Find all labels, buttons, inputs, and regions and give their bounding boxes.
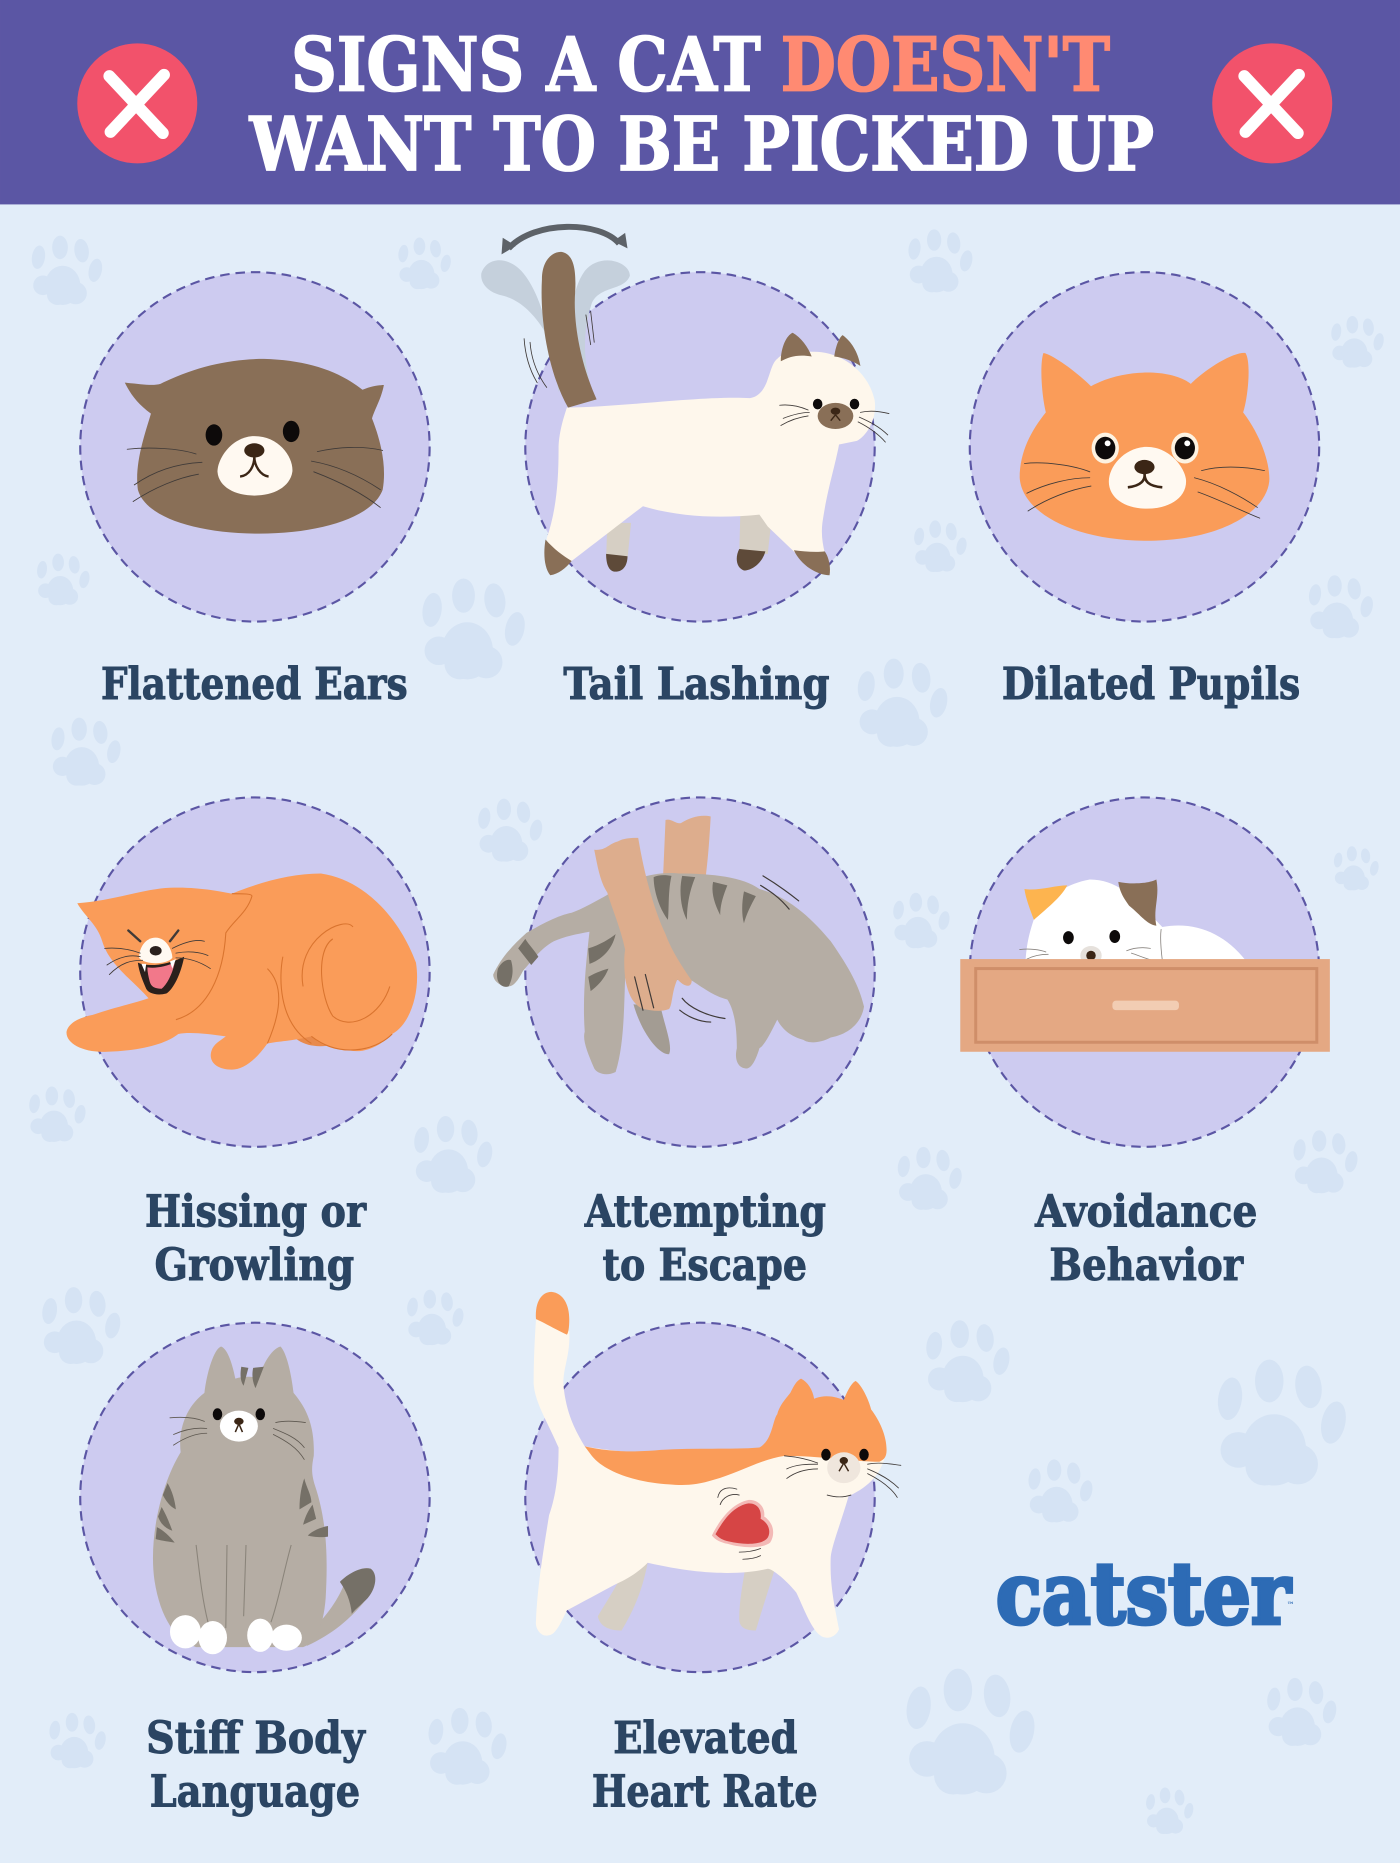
- dashed circle: [80, 797, 430, 1147]
- illustration: orange cat with dilated pupils: [1020, 353, 1269, 541]
- title: DOESN'T: [781, 22, 1110, 108]
- title: [249, 22, 1154, 188]
- illustration: siamese cat lashing tail: [481, 227, 889, 575]
- orange tail tip: [536, 1292, 569, 1335]
- white paws: [170, 1615, 302, 1654]
- label: Avoidance: [1034, 1186, 1257, 1237]
- illustration: stiff grey cat: [153, 1347, 375, 1654]
- far legs: [598, 1563, 775, 1631]
- label: Heart Rate: [592, 1766, 818, 1817]
- dashed circle: [970, 272, 1319, 622]
- panel: dilated pupils: [970, 272, 1319, 710]
- illustration: brown cat head with flattened ears: [125, 359, 384, 534]
- body: [153, 1347, 327, 1647]
- header banner: [0, 0, 1400, 204]
- label: [584, 1186, 826, 1291]
- heart: [712, 1500, 773, 1547]
- face: [213, 1408, 222, 1420]
- stripes: [156, 1367, 328, 1543]
- logo: catster: catster: [996, 1544, 1291, 1644]
- title: SIGNS A CAT: [291, 22, 761, 108]
- dashed circle: [970, 797, 1319, 1147]
- label: Stiff Body: [146, 1713, 366, 1764]
- tail: [307, 1568, 375, 1646]
- arrow: [509, 227, 619, 248]
- icon: right red X: [1212, 43, 1332, 163]
- label: Behavior: [1049, 1240, 1244, 1291]
- panel: hissing or growling: [67, 797, 430, 1291]
- dashed circle: [80, 272, 430, 622]
- far leg: [633, 1004, 670, 1054]
- far legs: [606, 511, 772, 559]
- drawer handle: [1112, 1001, 1179, 1010]
- label: Dilated Pupils: [1002, 659, 1300, 710]
- illustration: cat hiding behind drawer: [960, 879, 1330, 1052]
- label: [146, 1713, 366, 1817]
- drawer: [960, 959, 1330, 1052]
- dashed circle: [525, 797, 875, 1147]
- stripes: [497, 875, 756, 991]
- label: Flattened Ears: [101, 659, 408, 710]
- ears and paws: [781, 333, 860, 366]
- icon: left red X: [77, 43, 197, 163]
- cream body and tail: [534, 1319, 884, 1638]
- label: Growling: [155, 1240, 354, 1291]
- label: Elevated: [613, 1713, 797, 1764]
- leg lines: [196, 1545, 291, 1628]
- panel: stiff body language: [80, 1323, 430, 1817]
- label: Language: [150, 1766, 360, 1817]
- orange back and head: [585, 1379, 887, 1485]
- panel: flattened ears: [80, 272, 430, 710]
- dashed circle: [525, 1323, 875, 1672]
- cat body: [493, 873, 864, 1074]
- ghost tails: [481, 260, 630, 404]
- tail: [542, 252, 597, 408]
- front arm: [594, 838, 692, 1011]
- back arm: [663, 816, 711, 875]
- label: Attempting: [584, 1186, 826, 1237]
- label: [592, 1713, 818, 1817]
- panel: tail lashing: [481, 227, 889, 710]
- label: [145, 1186, 367, 1291]
- cat: [1026, 879, 1245, 960]
- label: Hissing or: [145, 1186, 367, 1237]
- dashed circle: [80, 1323, 430, 1672]
- body: [547, 351, 875, 572]
- illustration: cat with racing heart: [534, 1292, 901, 1638]
- face: [818, 403, 853, 429]
- panel: avoidance behavior: [960, 797, 1330, 1291]
- illustration: hissing orange cat: [67, 874, 417, 1070]
- logo: catster: ™: [1287, 1600, 1294, 1609]
- label: [1034, 1186, 1257, 1291]
- panel: elevated heart rate: [525, 1292, 901, 1817]
- label: Tail Lashing: [563, 659, 830, 710]
- label: to Escape: [603, 1240, 807, 1291]
- panel: attempting to escape: [493, 797, 875, 1291]
- dashed circle: [525, 272, 875, 622]
- illustration: grey cat being held: [493, 816, 864, 1074]
- title: WANT TO BE PICKED UP: [249, 102, 1154, 188]
- face: [827, 1452, 860, 1483]
